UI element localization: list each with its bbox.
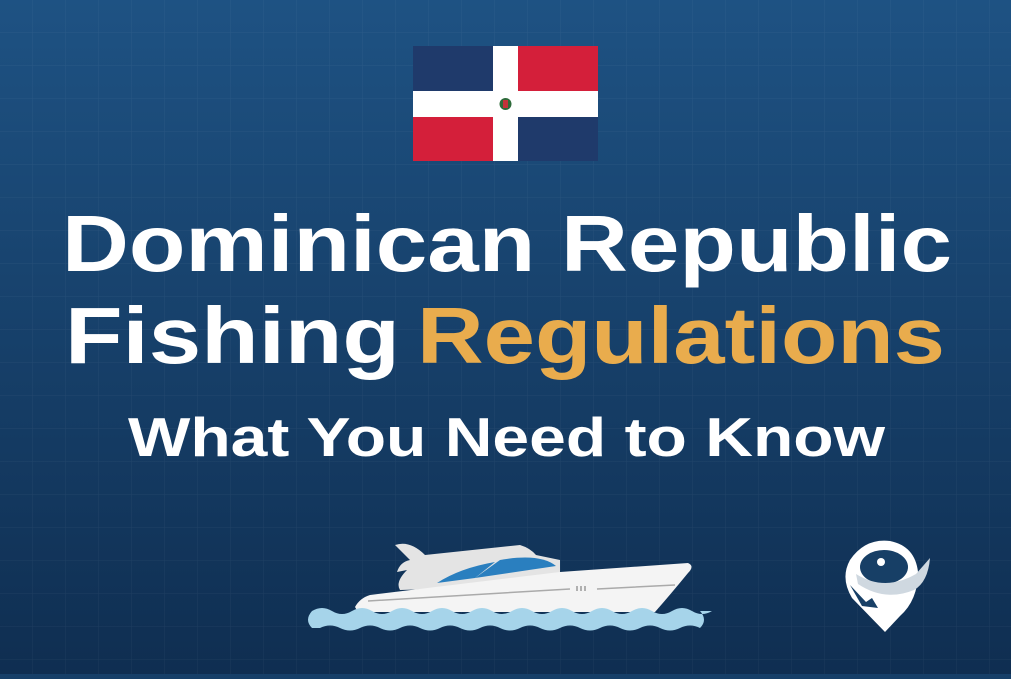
flag bbox=[413, 46, 598, 161]
subtitle: What You Need to Know bbox=[128, 406, 885, 468]
title line 2: Fishing bbox=[65, 291, 400, 380]
title line 2 bbox=[65, 291, 945, 380]
title line 2: Regulations bbox=[417, 291, 945, 380]
icon: boat bbox=[308, 544, 712, 630]
icon: logo bbox=[845, 541, 930, 632]
title line 1: Dominican Republic bbox=[62, 199, 952, 288]
